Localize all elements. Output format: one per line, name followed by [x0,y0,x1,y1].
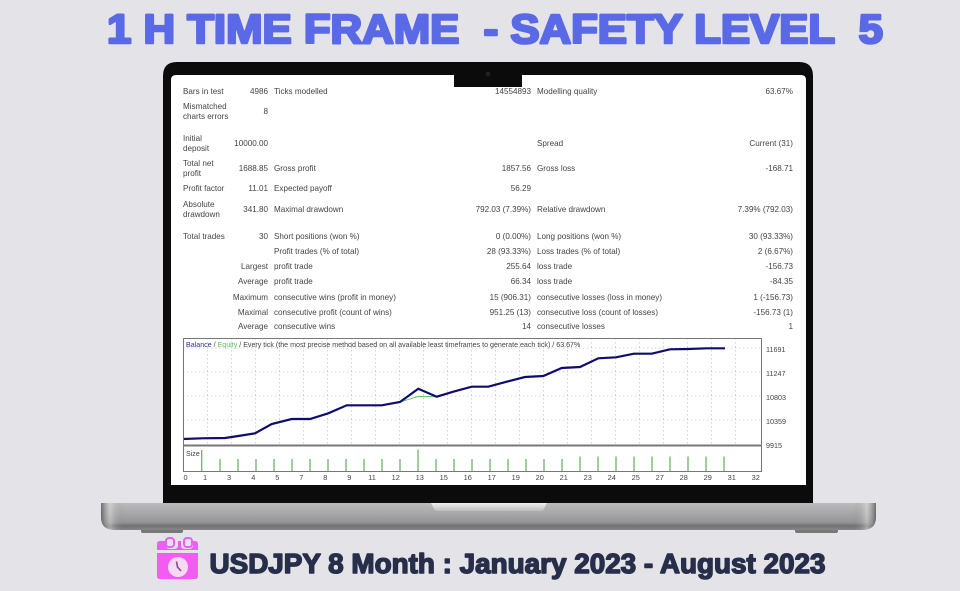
row: total trades [183,232,793,241]
laptop [101,62,876,533]
row: mismatched charts errors: charts errors [183,112,228,121]
x axis labels: 1 [203,473,207,482]
row: average trade: loss trade [537,277,573,286]
row: initial deposit and spread: Current (31) [749,139,793,148]
x axis labels: 11 [368,473,376,482]
row: bars and ticks: 63.67% [766,87,793,96]
row: profit factor: Expected payoff [274,184,333,193]
row: profit trades: Loss trades (% of total) [537,247,621,256]
x axis labels: 25 [632,473,640,482]
row: total trades: Total trades [183,232,225,241]
row: profit factor [183,184,531,193]
row: maximum consecutive: consecutive losses (loss in money) [537,293,662,302]
x axis labels: 29 [704,473,712,482]
x axis labels: 5 [275,473,279,482]
row: maximum consecutive: 1 (-156.73) [753,293,793,302]
row: total net profit: Gross loss [537,164,575,173]
camera [486,72,490,76]
row: maximum consecutive [233,293,793,302]
row: profit trades: Profit trades (% of total) [274,247,359,256]
x axis labels: 32 [752,473,760,482]
row: average consecutive: consecutive wins [274,322,335,331]
row: drawdown: Absolute [183,200,215,209]
row: bars and ticks: Modelling quality [537,87,598,96]
row: average trade: profit trade [274,277,313,286]
row: total net profit [183,159,793,178]
row: profit factor: 11.01 [248,184,268,193]
y axis labels: 11247 [766,369,785,378]
row: initial deposit and spread: Initial [183,134,202,143]
row: total net profit: 1857.56 [502,164,531,173]
row: total trades: 0 (0.00%) [496,232,531,241]
x axis labels: 9 [347,473,351,482]
row: maximal consecutive: Maximal [238,308,268,317]
row: largest trade: Largest [241,262,269,271]
row: total net profit: profit [183,169,202,178]
row: profit trades: 28 (93.33%) [487,247,531,256]
row: total net profit: Gross profit [274,164,317,173]
row: initial deposit and spread: Spread [537,139,563,148]
equity line [400,396,437,402]
row: total trades: 30 [259,232,268,241]
x axis labels: 31 [728,473,736,482]
title: 1 H TIME FRAME - SAFETY LEVEL 5 [107,6,883,52]
row: profit factor: 56.29 [511,184,531,193]
row: largest trade: 255.64 [506,262,531,271]
x axis labels: 12 [392,473,400,482]
row: largest trade [241,262,793,271]
row: bars and ticks [183,87,793,96]
footer caption: USDJPY 8 Month : January 2023 - August 2023 [210,548,826,579]
size panel bars [202,450,724,471]
row: maximal consecutive [238,308,793,317]
size label: Size [186,450,200,458]
chart frame [183,338,762,472]
row: average consecutive: Average [238,322,268,331]
row: drawdown: drawdown [183,210,220,219]
icon: calendar with clock [157,538,198,579]
x axis labels: 24 [608,473,616,482]
row: mismatched charts errors: Mismatched [183,102,227,111]
x axis labels: 15 [440,473,448,482]
x axis labels: 13 [416,473,424,482]
row: total net profit: 1688.85 [239,164,268,173]
row: total trades: Short positions (won %) [274,232,360,241]
x axis labels: 28 [680,473,688,482]
y axis labels: 11691 [766,345,785,354]
row: average trade [238,277,793,286]
laptop lid [163,62,813,503]
row: total net profit: -168.71 [766,164,793,173]
row: maximum consecutive: consecutive wins (profit in money) [274,293,396,302]
x axis labels: 16 [464,473,472,482]
x axis labels: 7 [299,473,303,482]
balance line [183,348,725,439]
row: maximal consecutive: -156.73 (1) [753,308,793,317]
x axis labels: 4 [251,473,255,482]
backtest report table [183,87,793,331]
row: largest trade: -156.73 [766,262,793,271]
row: initial deposit and spread [183,134,793,153]
row: total trades: 30 (93.33%) [749,232,793,241]
row: average consecutive: 14 [522,322,531,331]
row: average trade: 66.34 [511,277,531,286]
y axis labels: 10803 [766,393,786,402]
row: bars and ticks: Bars in test [183,87,224,96]
row: drawdown: 792.03 (7.39%) [476,205,531,214]
row: maximal consecutive: 951.25 (13) [490,308,531,317]
row: initial deposit and spread: deposit [183,144,210,153]
x axis labels: 20 [536,473,544,482]
x axis labels: 23 [584,473,592,482]
x axis labels: 17 [488,473,496,482]
row: average consecutive [238,322,793,331]
chart legend: Balance / Equity / Every tick (the most precise method based on all available least timeframes to generate each tick) / 63.67% [186,341,581,349]
row: mismatched charts errors [183,102,268,121]
row: average consecutive: consecutive losses [537,322,605,331]
row: bars and ticks: 4986 [250,87,268,96]
x axis labels: 19 [512,473,520,482]
row: profit trades: 2 (6.67%) [758,247,793,256]
row: maximum consecutive: 15 (906.31) [490,293,531,302]
row: bars and ticks: 14554893 [495,87,531,96]
row: drawdown: 341.80 [243,205,268,214]
x axis labels: 27 [656,473,664,482]
row: maximal consecutive: consecutive loss (count of losses) [537,308,658,317]
laptop base [101,503,876,530]
row: largest trade: loss trade [537,262,573,271]
row: initial deposit and spread: 10000.00 [234,139,268,148]
x axis labels: 8 [323,473,327,482]
row: total net profit: Total net [183,159,214,168]
row: drawdown: 7.39% (792.03) [738,205,793,214]
row: drawdown [183,200,793,219]
balance and equity chart [183,338,786,482]
row: total trades: Long positions (won %) [537,232,621,241]
row: profit factor: Profit factor [183,184,225,193]
row: maximal consecutive: consecutive profit (count of wins) [274,308,392,317]
x axis labels: 0 [183,473,188,482]
row: mismatched charts errors: 8 [263,107,268,116]
laptop feet [141,528,838,533]
row: profit trades [274,247,793,256]
x axis labels: 3 [227,473,231,482]
screen [171,75,806,485]
row: drawdown: Maximal drawdown [274,205,343,214]
row: maximum consecutive: Maximum [233,293,268,302]
row: average consecutive: 1 [788,322,793,331]
row: bars and ticks: Ticks modelled [274,87,328,96]
row: average trade: -84.35 [770,277,793,286]
x axis labels [183,473,760,482]
row: largest trade: profit trade [274,262,313,271]
x axis labels: 21 [560,473,568,482]
y axis labels: 9915 [766,441,782,450]
row: average trade: Average [238,277,268,286]
row: drawdown: Relative drawdown [537,205,605,214]
y axis labels [766,345,786,450]
y axis labels: 10359 [766,417,786,426]
